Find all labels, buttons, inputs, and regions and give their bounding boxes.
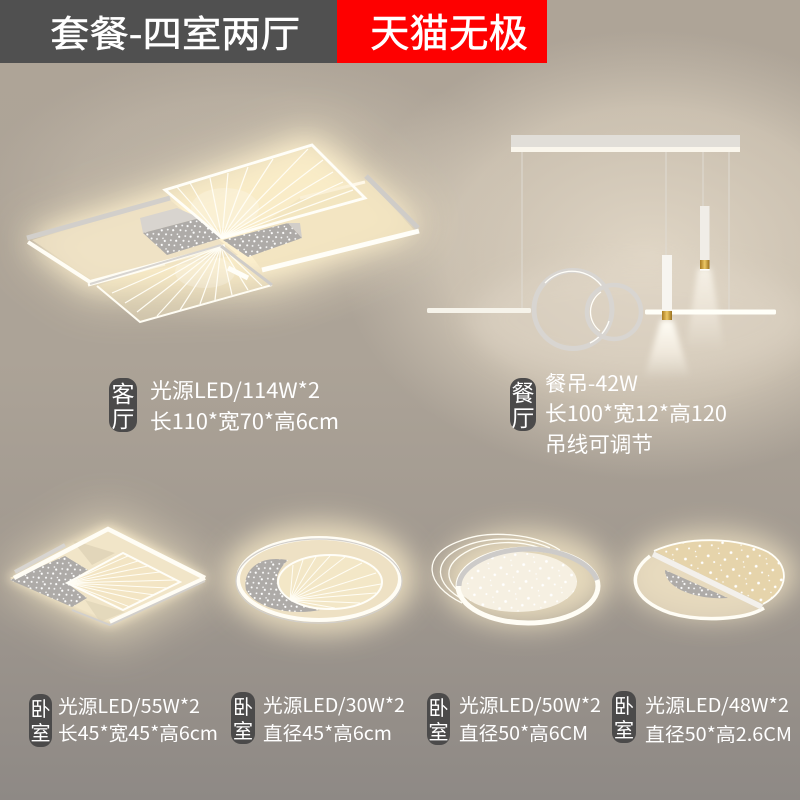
label: bedroom 4 specs: 卧 xyxy=(614,690,634,719)
label: dining room specs: 餐 xyxy=(512,374,534,408)
thin arc rings xyxy=(432,534,560,603)
fan disc xyxy=(278,555,382,609)
pendant glow xyxy=(470,260,800,380)
header: red brand tag xyxy=(337,0,547,63)
label: bedroom 4 specs: 室 xyxy=(614,714,634,743)
lamp: dining room pendant xyxy=(427,135,800,380)
title: 套餐-四室两厅 xyxy=(50,4,300,58)
glow xyxy=(627,530,797,618)
light rings xyxy=(534,270,612,348)
label: dining room specs xyxy=(510,368,727,459)
label: living room specs: 光源LED/114W*2 xyxy=(150,375,320,405)
square frame xyxy=(14,529,205,578)
upper fan panel xyxy=(165,145,365,238)
label: bedroom 3 specs: 光源LED/50W*2 xyxy=(459,691,601,718)
label: bedroom 2 specs xyxy=(231,691,405,746)
lower fan panel xyxy=(90,245,272,322)
spot beams xyxy=(686,268,724,350)
ceiling canopy xyxy=(511,135,740,147)
outer ring xyxy=(238,538,400,620)
glow xyxy=(440,530,610,626)
label: bedroom 3 specs: 室 xyxy=(428,716,448,745)
main ring xyxy=(458,549,598,623)
fan panel xyxy=(67,553,180,610)
inner cream area xyxy=(635,556,764,619)
label: living room specs xyxy=(109,375,339,436)
label: bedroom 2 specs: 直径45*高6cm xyxy=(263,719,392,746)
rear frames xyxy=(27,176,419,285)
header: red brand tag: 天猫无极 xyxy=(370,3,528,59)
label: living room specs: 长110*宽70*高6cm xyxy=(150,406,339,436)
header: package title band xyxy=(0,0,337,63)
label: dining room specs: 长100*宽12*高120 xyxy=(545,398,727,428)
lamp: living room ceiling light xyxy=(20,130,430,322)
label: dining room specs: 吊线可调节 xyxy=(545,428,653,459)
outer ring xyxy=(635,556,764,619)
perforated centre panels xyxy=(140,208,200,233)
lamp: bedroom round fan light xyxy=(224,522,416,634)
label: bedroom 1 specs xyxy=(29,692,218,747)
label: bedroom 3 specs xyxy=(427,691,601,746)
label: bedroom 1 specs: 室 xyxy=(30,717,50,746)
left and right light bars xyxy=(427,308,531,313)
glow xyxy=(0,515,215,640)
inner recess xyxy=(72,540,115,565)
perforated half disc xyxy=(665,570,728,598)
label: bedroom 2 specs: 卧 xyxy=(233,691,253,720)
wide glow xyxy=(20,130,430,295)
label: bedroom 1 specs: 卧 xyxy=(30,693,50,722)
glow xyxy=(224,522,416,634)
spot cylinder, short xyxy=(700,206,710,260)
lamp: bedroom square light xyxy=(0,515,215,640)
label: living room specs: 厅 xyxy=(112,400,134,434)
lamp: bedroom half-disc light xyxy=(627,530,797,619)
label: bedroom 4 specs: 直径50*高2.6CM xyxy=(645,720,792,747)
label: bedroom 3 specs: 直径50*高6CM xyxy=(459,719,588,746)
label: bedroom 1 specs: 长45*宽45*高6cm xyxy=(58,719,218,746)
label: living room specs: 客 xyxy=(112,375,134,409)
diagonal bar xyxy=(653,554,762,607)
label: bedroom 3 specs: 卧 xyxy=(428,692,448,721)
label: dining room specs: 厅 xyxy=(512,399,534,433)
perforated panel xyxy=(10,556,88,607)
starry half disc xyxy=(654,540,784,604)
suspension wires xyxy=(522,152,729,310)
label: dining room specs: 餐吊-42W xyxy=(545,368,638,398)
label: bedroom 4 specs xyxy=(612,690,792,747)
label: bedroom 1 specs: 光源LED/55W*2 xyxy=(58,692,200,719)
perforated crescent xyxy=(245,559,320,612)
starry disc xyxy=(457,552,577,612)
lamp: bedroom starry disc light xyxy=(432,530,610,626)
label: bedroom 2 specs: 室 xyxy=(233,715,253,744)
label: bedroom 2 specs: 光源LED/30W*2 xyxy=(263,691,405,718)
label: bedroom 4 specs: 光源LED/48W*2 xyxy=(645,691,789,718)
spot cylinder, long xyxy=(662,255,672,312)
